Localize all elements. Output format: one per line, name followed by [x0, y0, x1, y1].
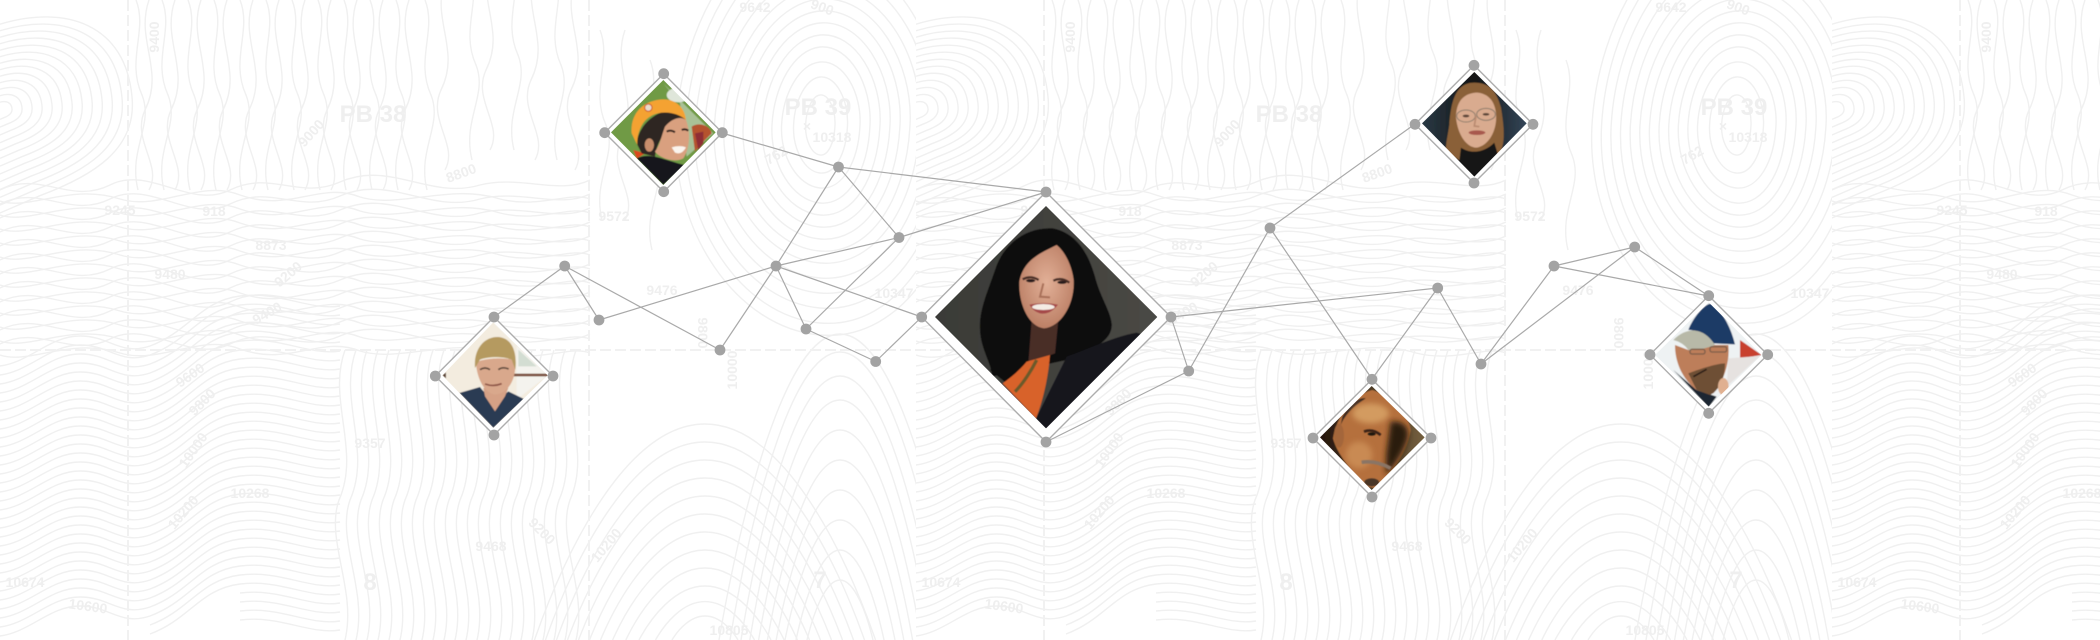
topographic contour map background: 9800: [185, 385, 219, 419]
topographic contour map background: 10000: [1640, 350, 1656, 389]
topographic contour map background: 10000: [724, 350, 740, 389]
topographic contour map background: 8873: [255, 237, 287, 253]
topographic contour map background: 9468: [1391, 538, 1423, 554]
topographic contour map background: 8800: [444, 160, 479, 186]
portrait: bearded man in navy cap: [1645, 290, 1773, 419]
topographic contour map background: 9200: [525, 514, 559, 548]
topographic contour map background: 9800: [1101, 385, 1135, 419]
topographic contour map background: 10600: [984, 595, 1025, 617]
topographic contour map background: 10268: [1147, 485, 1186, 501]
topographic contour map background: 9245: [104, 202, 136, 218]
topographic contour map background: 9600: [1089, 359, 1124, 390]
topographic contour map background: 10674: [922, 574, 961, 590]
portrait: woman in orange climbing helmet: [599, 68, 728, 197]
topographic contour map background: PB 39: [785, 94, 851, 121]
topographic contour map background: 9000: [295, 116, 328, 150]
topographic contour map background: 9400: [1166, 298, 1201, 328]
topographic contour map background: 9400: [250, 298, 285, 328]
topographic contour map background: 10200: [587, 525, 625, 565]
portrait: blond man in navy shirt: [430, 312, 558, 440]
topographic contour map background: 9480: [1070, 266, 1102, 282]
topographic contour map background: 10805: [710, 622, 749, 638]
topographic contour map background: 8800: [1360, 160, 1395, 186]
topographic contour map background: 10600: [68, 595, 109, 617]
network junction nodes: [559, 162, 1640, 376]
central portrait: woman with black hair: [916, 187, 1176, 447]
topographic contour map background: 9400: [146, 21, 162, 53]
topographic contour map background: 10347: [875, 285, 914, 301]
topographic contour map background: 10318: [1729, 129, 1768, 145]
topographic contour map background: 10674: [6, 574, 45, 590]
topographic contour map background: 10000: [1091, 429, 1127, 471]
topographic contour map background: 9572: [598, 208, 630, 224]
topographic contour map background: 9480: [1986, 266, 2018, 282]
topographic contour map background: 9476: [1562, 282, 1594, 298]
topographic contour map background: 9572: [1514, 208, 1546, 224]
topographic contour map background: 9800: [695, 317, 711, 349]
topographic contour map background: 918: [202, 203, 226, 219]
topographic contour map background: 9245: [1020, 202, 1052, 218]
topographic contour map background: 9400: [1062, 21, 1078, 53]
topographic contour map background: 9357: [354, 435, 386, 451]
topographic contour map background: 10674: [1838, 574, 1877, 590]
topographic contour map background: PB 38: [1256, 101, 1322, 128]
topographic contour map background: 10000: [2007, 429, 2043, 471]
portrait: close-up of older man's face: [1308, 374, 1436, 502]
topographic contour map background: 918: [2034, 203, 2058, 219]
topographic contour map background: PB 39: [1701, 94, 1767, 121]
topographic contour map background: 8: [1279, 569, 1293, 596]
topographic contour map background: 9800: [1611, 317, 1627, 349]
topographic contour map background: ×: [803, 118, 811, 134]
topographic contour map background: 10000: [175, 429, 211, 471]
topographic contour map background: 9468: [475, 538, 507, 554]
topographic contour map background: 10200: [164, 492, 202, 532]
topographic contour map background: 10200: [1080, 492, 1118, 532]
topographic contour map background: 7: [1729, 567, 1743, 594]
topographic contour map background: 9800: [2017, 385, 2051, 419]
topographic contour map background: 8873: [1171, 237, 1203, 253]
topographic contour map background: 10347: [1791, 285, 1830, 301]
topographic contour map background: 10200: [1996, 492, 2034, 532]
topographic contour map background: 9200: [1187, 258, 1221, 290]
topographic contour map background: 9600: [173, 359, 208, 390]
topographic contour map background: 762: [762, 142, 790, 168]
topographic contour map background: 10200: [1503, 525, 1541, 565]
topographic contour map background: PB 38: [340, 101, 406, 128]
topographic contour map background: 762: [1678, 142, 1706, 168]
topographic contour map background: 9600: [2005, 359, 2040, 390]
topographic contour map background: 8: [363, 569, 377, 596]
topographic contour map background: 918: [1118, 203, 1142, 219]
topographic contour map background: 10805: [1626, 622, 1665, 638]
topographic contour map background: 10600: [1900, 595, 1941, 617]
portrait: woman with glasses and black turtleneck: [1410, 60, 1538, 188]
topographic contour map background: 9476: [646, 282, 678, 298]
topographic contour map background: 9200: [1441, 514, 1475, 548]
topographic contour map background: 9400: [1978, 21, 1994, 53]
topographic contour map background: 9000: [1211, 116, 1244, 150]
topographic contour map background: 10318: [813, 129, 852, 145]
topographic contour map background: 9245: [1936, 202, 1968, 218]
network connector lines: [494, 124, 1709, 442]
topographic contour map background: 9200: [271, 258, 305, 290]
topographic contour map background: 9480: [154, 266, 186, 282]
topographic contour map background: 9357: [1270, 435, 1302, 451]
topographic contour map background: 10268: [231, 485, 270, 501]
topographic contour map background: ×: [1719, 118, 1727, 134]
topographic contour map background: 7: [813, 567, 827, 594]
